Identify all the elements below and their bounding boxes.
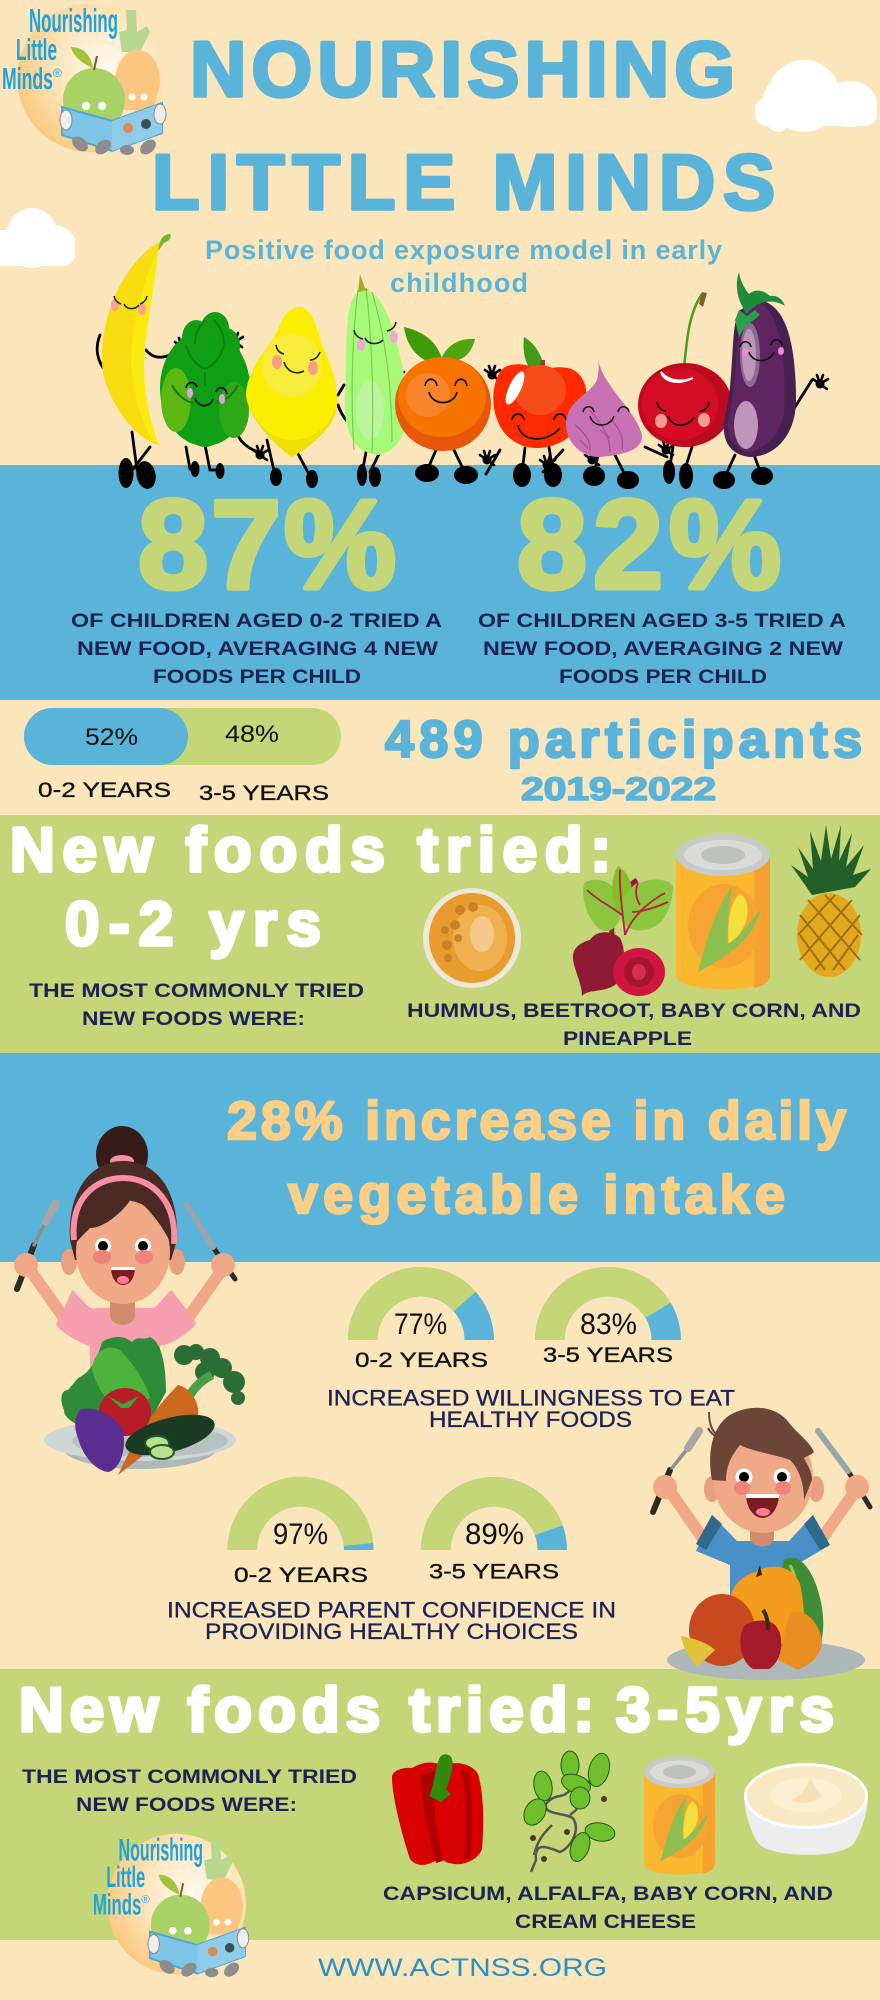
- chart: gauge 77 percent: [348, 1267, 494, 1372]
- chart: gauge 89 percent: [421, 1477, 567, 1584]
- text: increased willingness: HEALTHY FOODS: [429, 1407, 632, 1432]
- heading: new foods tried 3-5: New foods tried:: [19, 1676, 594, 1745]
- chart: gauge 97 percent: 0-2 YEARS: [234, 1564, 368, 1587]
- icon: alfalfa sprouts: [519, 1751, 616, 1872]
- text: foods list 3-5: CAPSICUM, ALFALFA, BABY CORN, AND: [383, 1883, 833, 1905]
- heading: participants: 2019-2022: [521, 771, 716, 807]
- stat: 82 percent: 82%: [517, 474, 781, 615]
- fork and knife: [17, 1203, 235, 1289]
- icon: beetroot: [573, 866, 673, 996]
- icon: can of baby corn: [644, 1756, 715, 1875]
- stat caption: ages 0-2: OF CHILDREN AGED 0-2 TRIED A: [71, 610, 442, 632]
- text: increased willingness: [327, 1386, 735, 1432]
- heading: new foods tried 0-2: 0-2 yrs: [65, 890, 321, 959]
- band: statistics background: [0, 465, 880, 700]
- text: most commonly tried 3-5: NEW FOODS WERE:: [76, 1794, 297, 1816]
- subtitle: Positive food exposure model in early: [205, 235, 722, 265]
- chart: gauge 83 percent: 83%: [580, 1308, 637, 1341]
- limbs and feet: [97, 333, 828, 491]
- chart: age split bar: 3-5 YEARS: [199, 782, 329, 805]
- chart: age split bar: 52%: [85, 724, 138, 751]
- icon: cloud left: [0, 208, 75, 268]
- logo: bottom: Minds: [93, 1889, 141, 1922]
- band: vegetable intake background: [0, 1053, 880, 1262]
- logo: top left: Minds: [2, 61, 53, 96]
- chart: gauge 97 percent: 97%: [273, 1518, 328, 1551]
- band: new foods 0-2 background: [0, 815, 880, 1053]
- heading: new foods tried 0-2: [10, 816, 611, 959]
- title: [152, 25, 775, 226]
- text: increased parent confidence: INCREASED PARENT CONFIDENCE IN: [167, 1598, 616, 1622]
- text: most commonly tried 0-2: [29, 980, 364, 1030]
- illustration: row of smiling fruit and vegetables: [97, 234, 828, 491]
- logo: top left: Little: [16, 32, 57, 67]
- eggplant: [724, 272, 796, 457]
- chart: age split bar: 0-2 YEARS: [38, 779, 171, 802]
- icon: cream cheese tub: [744, 1763, 868, 1855]
- illustration: boy with fruit: [653, 1408, 870, 1680]
- chart: gauge 83 percent: [535, 1267, 681, 1367]
- heading: new foods tried 0-2: New foods tried:: [10, 816, 611, 885]
- heading: new foods tried 3-5: 3-5yrs: [616, 1676, 834, 1745]
- text: foods list 3-5: [383, 1883, 833, 1933]
- stat caption: ages 3-5: NEW FOOD, AVERAGING 2 NEW: [483, 638, 844, 660]
- zucchini: [345, 274, 408, 455]
- chart: gauge 89 percent: 89%: [465, 1518, 524, 1551]
- text: most commonly tried 0-2: THE MOST COMMONLY TRIED: [29, 980, 364, 1002]
- text: increased willingness: INCREASED WILLINGNESS TO EAT: [327, 1386, 735, 1410]
- chart: gauge 77 percent: 0-2 YEARS: [355, 1349, 488, 1372]
- stat caption: ages 3-5: OF CHILDREN AGED 3-5 TRIED A: [478, 610, 846, 632]
- fork and knife: [653, 1431, 870, 1512]
- chart: gauge 89 percent: 3-5 YEARS: [429, 1560, 559, 1584]
- chart: gauge 83 percent: 3-5 YEARS: [543, 1344, 673, 1367]
- heading: vegetable intake: 28% increase in daily: [227, 1091, 846, 1151]
- band: new foods 3-5 background: [0, 1669, 880, 1940]
- lemon: [246, 307, 337, 457]
- logo: top left: [2, 2, 166, 157]
- illustration: girl with vegetables: [14, 1126, 245, 1475]
- title: LITTLE MINDS: [152, 138, 775, 226]
- logo: bottom: Nourishing: [119, 1832, 203, 1867]
- stat: 87 percent: 87%: [138, 474, 396, 615]
- logo: bottom: [93, 1832, 249, 1980]
- icon: cloud right: [755, 60, 877, 132]
- banana: [102, 234, 171, 445]
- heading: vegetable intake: [227, 1091, 846, 1225]
- stat: 87 percent: [71, 474, 442, 688]
- text: foods list 3-5: CREAM CHEESE: [515, 1911, 696, 1933]
- icon: capsicum: [392, 1754, 483, 1865]
- text: increased parent confidence: PROVIDING HEALTHY CHOICES: [205, 1619, 578, 1644]
- subtitle: childhood: [390, 268, 528, 298]
- stat caption: ages 0-2: NEW FOOD, AVERAGING 4 NEW: [77, 638, 439, 660]
- plate of fruit: [667, 1558, 865, 1680]
- text: foods list 0-2: HUMMUS, BEETROOT, BABY CORN, AND: [407, 1000, 861, 1022]
- text: most commonly tried 0-2: NEW FOODS WERE:: [82, 1008, 305, 1030]
- chart: age split bar: [24, 708, 341, 805]
- logo: bottom: ®: [141, 1894, 150, 1906]
- stat caption: ages 0-2: FOODS PER CHILD: [153, 666, 361, 688]
- artichoke: [160, 312, 250, 447]
- stat caption: ages 3-5: FOODS PER CHILD: [559, 666, 767, 688]
- stat: 82 percent: [478, 474, 846, 688]
- logo: top left: Nourishing: [29, 2, 118, 39]
- icon: pineapple: [791, 825, 871, 977]
- logo: bottom: Little: [106, 1861, 145, 1894]
- text: most commonly tried 3-5: [22, 1766, 357, 1816]
- text: foods list 0-2: PINEAPPLE: [563, 1028, 692, 1050]
- chart: gauge 97 percent: [227, 1477, 374, 1587]
- chart: gauge 77 percent: 77%: [394, 1308, 447, 1341]
- text: foods list 0-2: [407, 1000, 861, 1050]
- orange: [395, 327, 491, 451]
- title: NOURISHING: [190, 25, 735, 113]
- heading: participants: 489 participants: [385, 711, 862, 769]
- text: most commonly tried 3-5: THE MOST COMMONLY TRIED: [22, 1766, 357, 1788]
- subtitle: [205, 235, 722, 298]
- chart: age split bar: 48%: [225, 721, 279, 748]
- heading: participants: [385, 711, 862, 807]
- logo: top left: ®: [53, 66, 62, 80]
- apple: [493, 337, 587, 448]
- icon: can of baby corn: [676, 834, 770, 990]
- text: increased parent confidence: [167, 1598, 616, 1644]
- heading: vegetable intake: vegetable intake: [288, 1165, 785, 1225]
- stat caption: ages 3-5: [478, 610, 846, 688]
- cherry: [638, 292, 732, 447]
- icon: hummus bowl: [423, 888, 521, 988]
- plate of vegetables: [44, 1337, 245, 1475]
- footer: website: WWW.ACTNSS.ORG: [318, 1954, 607, 1982]
- purple fig: [566, 357, 642, 457]
- stat caption: ages 0-2: [71, 610, 442, 688]
